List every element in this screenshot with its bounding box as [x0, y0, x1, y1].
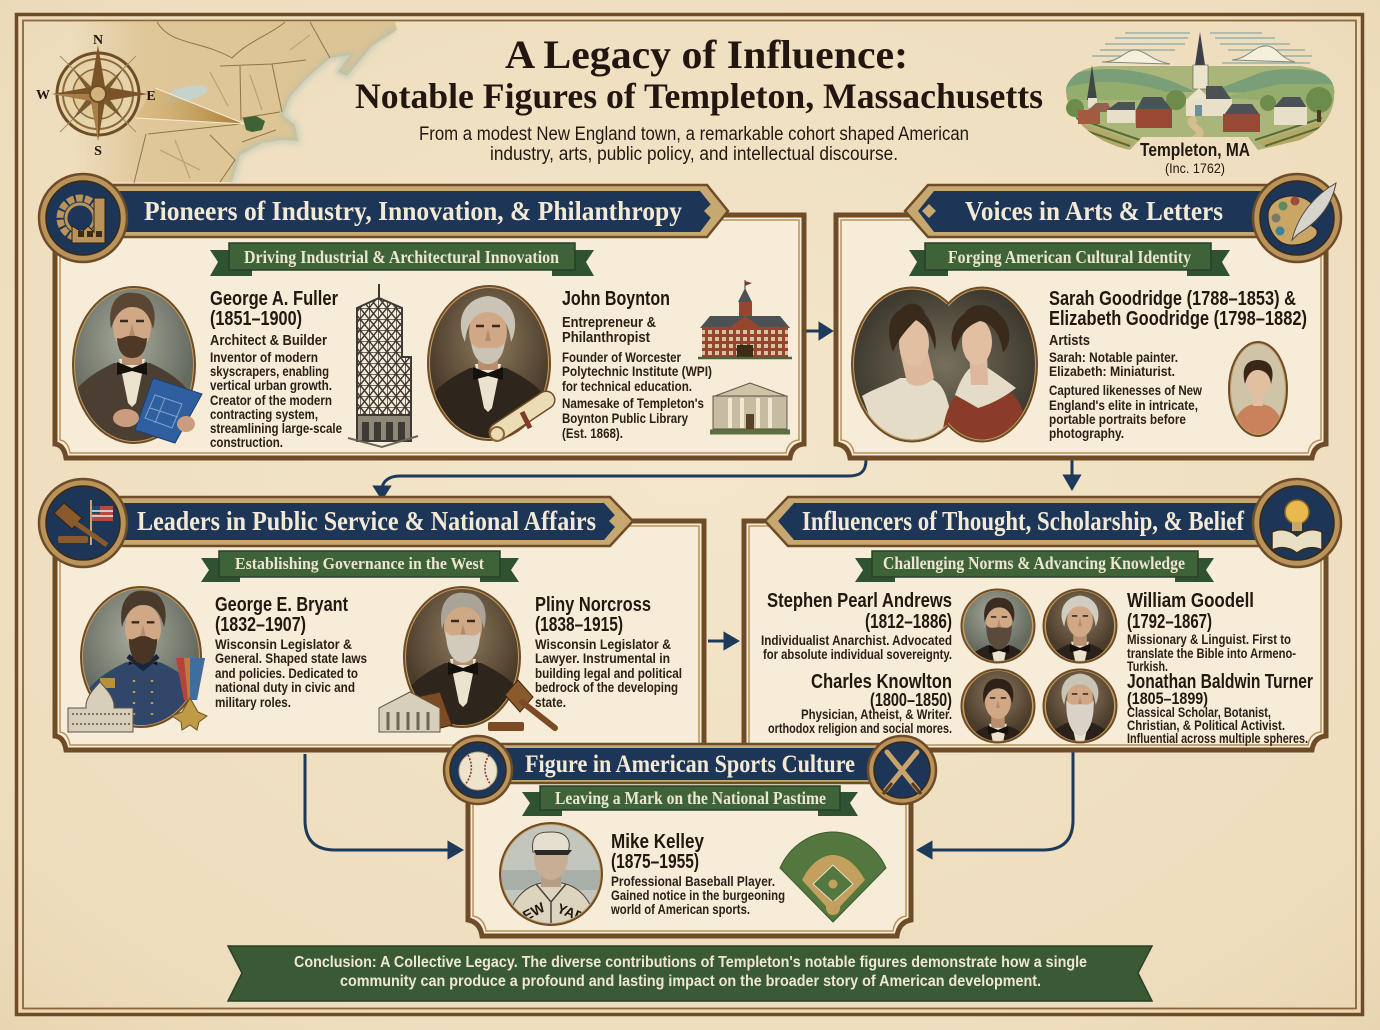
text: George E. Bryant: [215, 594, 367, 710]
subtitle text: From a modest New England town, a remarkable cohort shaped American: [419, 124, 969, 145]
ribbon subtitle: [855, 551, 1214, 582]
panel frame: [55, 521, 704, 750]
portrait: miniature: [1228, 340, 1288, 440]
panel frame: [468, 775, 911, 936]
panel: figure in american sports culture: [444, 736, 936, 936]
text: John Boynton: Founder of Worcester: [562, 349, 681, 365]
text: Goodridge sisters: Elizabeth: Miniaturist.: [1049, 363, 1175, 379]
text: George E. Bryant: military roles.: [215, 694, 291, 710]
icon: compass rose: N: [93, 33, 103, 48]
header banner: [110, 497, 633, 546]
text: John Boynton: for technical education.: [562, 378, 692, 394]
text: George E. Bryant: (1832–1907): [215, 614, 306, 636]
text: Charles Knowlton: Physician, Atheist, & Writer.: [801, 706, 952, 722]
text: George E. Bryant: George E. Bryant: [215, 594, 348, 616]
conclusion banner: community can produce a profound and lasting impact on the broader story of American development.: [340, 973, 1041, 990]
header banner: [490, 744, 890, 783]
text: William Goodell: (1792–1867): [1127, 611, 1212, 633]
text: Stephen Pearl Andrews: for absolute individual sovereignty.: [763, 646, 952, 662]
panel frame: [55, 215, 804, 458]
portrait: William Goodell: [1042, 588, 1118, 664]
panel: voices in arts and letters: [836, 174, 1341, 458]
icon: library building: [710, 383, 790, 432]
text: Jonathan Baldwin Turner: Classical Scholar, Botanist,: [1127, 704, 1271, 720]
text: John Boynton: [562, 288, 712, 441]
text: Mike Kelley: (1875–1955): [611, 851, 699, 873]
arrow: influencers to sports: [919, 752, 1073, 857]
conclusion banner: [228, 946, 1152, 1001]
text: George A. Fuller: Inventor of modern: [210, 349, 318, 365]
icon: gear and factory: [39, 174, 127, 262]
text: Pliny Norcross: bedrock of the developing: [535, 679, 678, 695]
header banner: [905, 185, 1275, 237]
text: Goodridge sisters: England's elite in intricate,: [1049, 397, 1198, 413]
text: George E. Bryant: national duty in civic and: [215, 679, 355, 695]
portrait: George E. Bryant: [68, 586, 208, 732]
text: George A. Fuller: construction.: [210, 434, 283, 450]
panel: pioneers of industry: [39, 174, 804, 462]
icon: baseball field: [780, 832, 886, 922]
ribbon subtitle: [909, 243, 1230, 276]
text: John Boynton: (Est. 1868).: [562, 425, 623, 441]
text: George A. Fuller: contracting system,: [210, 406, 318, 422]
panel frame: [836, 215, 1326, 458]
portrait: Pliny Norcross: [378, 586, 558, 733]
text: Pliny Norcross: Wisconsin Legislator &: [535, 636, 671, 652]
arrow: pioneers to voices: [806, 324, 831, 338]
text: George A. Fuller: skyscrapers, enabling: [210, 363, 329, 379]
text: Mike Kelley: world of American sports.: [610, 901, 750, 917]
portrait: Mike Kelley: EW: [520, 899, 548, 924]
portrait: Sarah and Elizabeth Goodridge: [850, 285, 1040, 445]
panel: leaders in public service: [39, 479, 704, 757]
text: John Boynton: Philanthropist: [562, 329, 650, 346]
text: Goodridge sisters: Captured likenesses of New: [1049, 382, 1202, 398]
ribbon subtitle: Challenging Norms & Advancing Knowledge: [883, 553, 1185, 573]
icon: compass rose: E: [146, 89, 156, 104]
text: Jonathan Baldwin Turner: Influential across multiple spheres.: [1127, 730, 1308, 746]
text: Pliny Norcross: building legal and political: [535, 665, 682, 681]
icon: palette and quill: [1253, 174, 1341, 262]
text: Jonathan Baldwin Turner: (1805–1899): [1127, 689, 1208, 708]
text: Charles Knowlton: orthodox religion and social mores.: [768, 720, 952, 736]
icon: baseball: [444, 736, 512, 804]
text: William Goodell: [1127, 590, 1296, 674]
text: Pliny Norcross: Pliny Norcross: [535, 594, 651, 616]
text: Jonathan Baldwin Turner: [1127, 671, 1313, 746]
illustration: Templeton town: Templeton, MA: [1140, 140, 1250, 160]
subtitle text: [419, 124, 969, 165]
text: Stephen Pearl Andrews: (1812–1886): [865, 611, 952, 633]
portrait: Stephen Pearl Andrews: [960, 588, 1036, 664]
icon: skyscraper steel frame: [348, 284, 418, 447]
illustration: Templeton town: (Inc. 1762): [1165, 160, 1225, 176]
text: Mike Kelley: Professional Baseball Player.: [611, 873, 775, 889]
text: Charles Knowlton: [768, 671, 952, 736]
text: George A. Fuller: [210, 288, 342, 450]
text: Jonathan Baldwin Turner: Jonathan Baldwin Turner: [1127, 671, 1313, 693]
icon: gavel and flag: [39, 479, 127, 567]
icon: college building: [698, 280, 792, 358]
text: Goodridge sisters: Sarah: Notable painter.: [1049, 349, 1178, 365]
text: George A. Fuller: streamlining large-scale: [210, 420, 342, 436]
arrow: voices to influencers: [1065, 460, 1079, 488]
text: Goodridge sisters: portable portraits before: [1049, 411, 1186, 427]
text: Charles Knowlton: (1800–1850): [870, 690, 952, 710]
text: Goodridge sisters: Artists: [1049, 332, 1090, 349]
text: Pliny Norcross: state.: [535, 694, 566, 710]
portrait: Mike Kelley: YAE: [555, 900, 586, 925]
header banner: [765, 497, 1275, 546]
text: George A. Fuller: George A. Fuller: [210, 288, 338, 310]
ribbon subtitle: [522, 786, 858, 816]
icon: compass rose: S: [94, 144, 102, 159]
ribbon subtitle: Leaving a Mark on the National Pastime: [555, 788, 826, 808]
ribbon subtitle: [210, 243, 594, 276]
text: John Boynton: Polytechnic Institute (WPI): [562, 363, 712, 379]
subtitle text: industry, arts, public policy, and intellectual discourse.: [490, 144, 898, 165]
conclusion banner: Conclusion: A Collective Legacy. The diverse contributions of Templeton's notable figures demonstrate how a single: [294, 954, 1087, 971]
ribbon subtitle: Establishing Governance in the West: [235, 554, 484, 573]
ribbon subtitle: Driving Industrial & Architectural Innovation: [244, 247, 559, 267]
title: [355, 32, 1043, 116]
text: Mike Kelley: [610, 831, 785, 917]
text: Goodridge sisters: Sarah Goodridge (1788–1853) &: [1049, 288, 1296, 310]
text: John Boynton: Namesake of Templeton's: [562, 395, 704, 411]
portrait: Mike Kelley: [500, 822, 602, 930]
text: John Boynton: John Boynton: [562, 288, 670, 310]
text: Pliny Norcross: (1838–1915): [535, 614, 623, 636]
icon: crossed bats: [868, 736, 936, 804]
portrait: Charles Knowlton: [960, 668, 1036, 744]
icon: compass rose: W: [36, 88, 50, 103]
text: Goodridge sisters: Elizabeth Goodridge (1798–1882): [1049, 308, 1307, 330]
text: George E. Bryant: and policies. Dedicated to: [215, 665, 358, 681]
text: William Goodell: Missionary & Linguist. First to: [1127, 631, 1291, 647]
text: Jonathan Baldwin Turner: Christian, & Political Activist.: [1127, 717, 1285, 733]
ribbon subtitle: Forging American Cultural Identity: [948, 247, 1191, 267]
text: William Goodell: William Goodell: [1127, 590, 1254, 612]
text: Stephen Pearl Andrews: [761, 590, 952, 662]
text: Mike Kelley: Gained notice in the burgeoning: [611, 887, 785, 903]
portrait: Jonathan Baldwin Turner: [1042, 668, 1118, 744]
text: George A. Fuller: vertical urban growth.: [210, 377, 332, 393]
header banner: [110, 185, 728, 237]
title: Notable Figures of Templeton, Massachusetts: [355, 76, 1043, 116]
text: George A. Fuller: Architect & Builder: [210, 332, 327, 349]
text: Stephen Pearl Andrews: Stephen Pearl Andrews: [767, 590, 952, 612]
header banner: Leaders in Public Service & National Affairs: [137, 506, 596, 536]
text: George E. Bryant: General. Shaped state laws: [215, 650, 367, 666]
text: William Goodell: Turkish.: [1127, 658, 1168, 674]
text: Goodridge sisters: [1049, 288, 1307, 441]
text: George A. Fuller: (1851–1900): [210, 308, 302, 330]
panel frame: [744, 521, 1326, 750]
ribbon subtitle: [201, 551, 519, 582]
portrait: John Boynton: [427, 285, 556, 442]
icon: compass rose: [36, 33, 156, 159]
text: Stephen Pearl Andrews: Individualist Anarchist. Advocated: [761, 632, 952, 648]
portrait: George A. Fuller: [72, 286, 203, 444]
text: Charles Knowlton: Charles Knowlton: [811, 671, 952, 693]
text: Goodridge sisters: photography.: [1049, 425, 1124, 441]
text: John Boynton: Entrepreneur &: [562, 314, 656, 331]
arrow: leaders to influencers: [708, 634, 737, 648]
text: George E. Bryant: Wisconsin Legislator &: [215, 636, 352, 652]
header banner: Figure in American Sports Culture: [525, 751, 855, 778]
text: Pliny Norcross: Lawyer. Instrumental in: [535, 650, 670, 666]
header banner: Influencers of Thought, Scholarship, & Belief: [802, 506, 1245, 536]
text: John Boynton: Boynton Public Library: [562, 410, 688, 426]
illustration: Templeton town: [1060, 32, 1340, 176]
text: Pliny Norcross: [535, 594, 682, 710]
icon: lightbulb and book: [1253, 479, 1341, 567]
text: William Goodell: translate the Bible into Armeno-: [1127, 645, 1296, 661]
text: George A. Fuller: Creator of the modern: [210, 392, 332, 408]
panel: influencers of thought: [742, 478, 1342, 752]
header banner: Pioneers of Industry, Innovation, & Philanthropy: [144, 196, 682, 226]
title: A Legacy of Influence:: [505, 32, 908, 77]
arrow: voices to leaders: [375, 460, 866, 498]
header banner: Voices in Arts & Letters: [965, 196, 1223, 226]
map of New England: [70, 22, 397, 183]
arrow: leaders to sports: [305, 754, 461, 857]
text: Mike Kelley: Mike Kelley: [611, 831, 705, 853]
